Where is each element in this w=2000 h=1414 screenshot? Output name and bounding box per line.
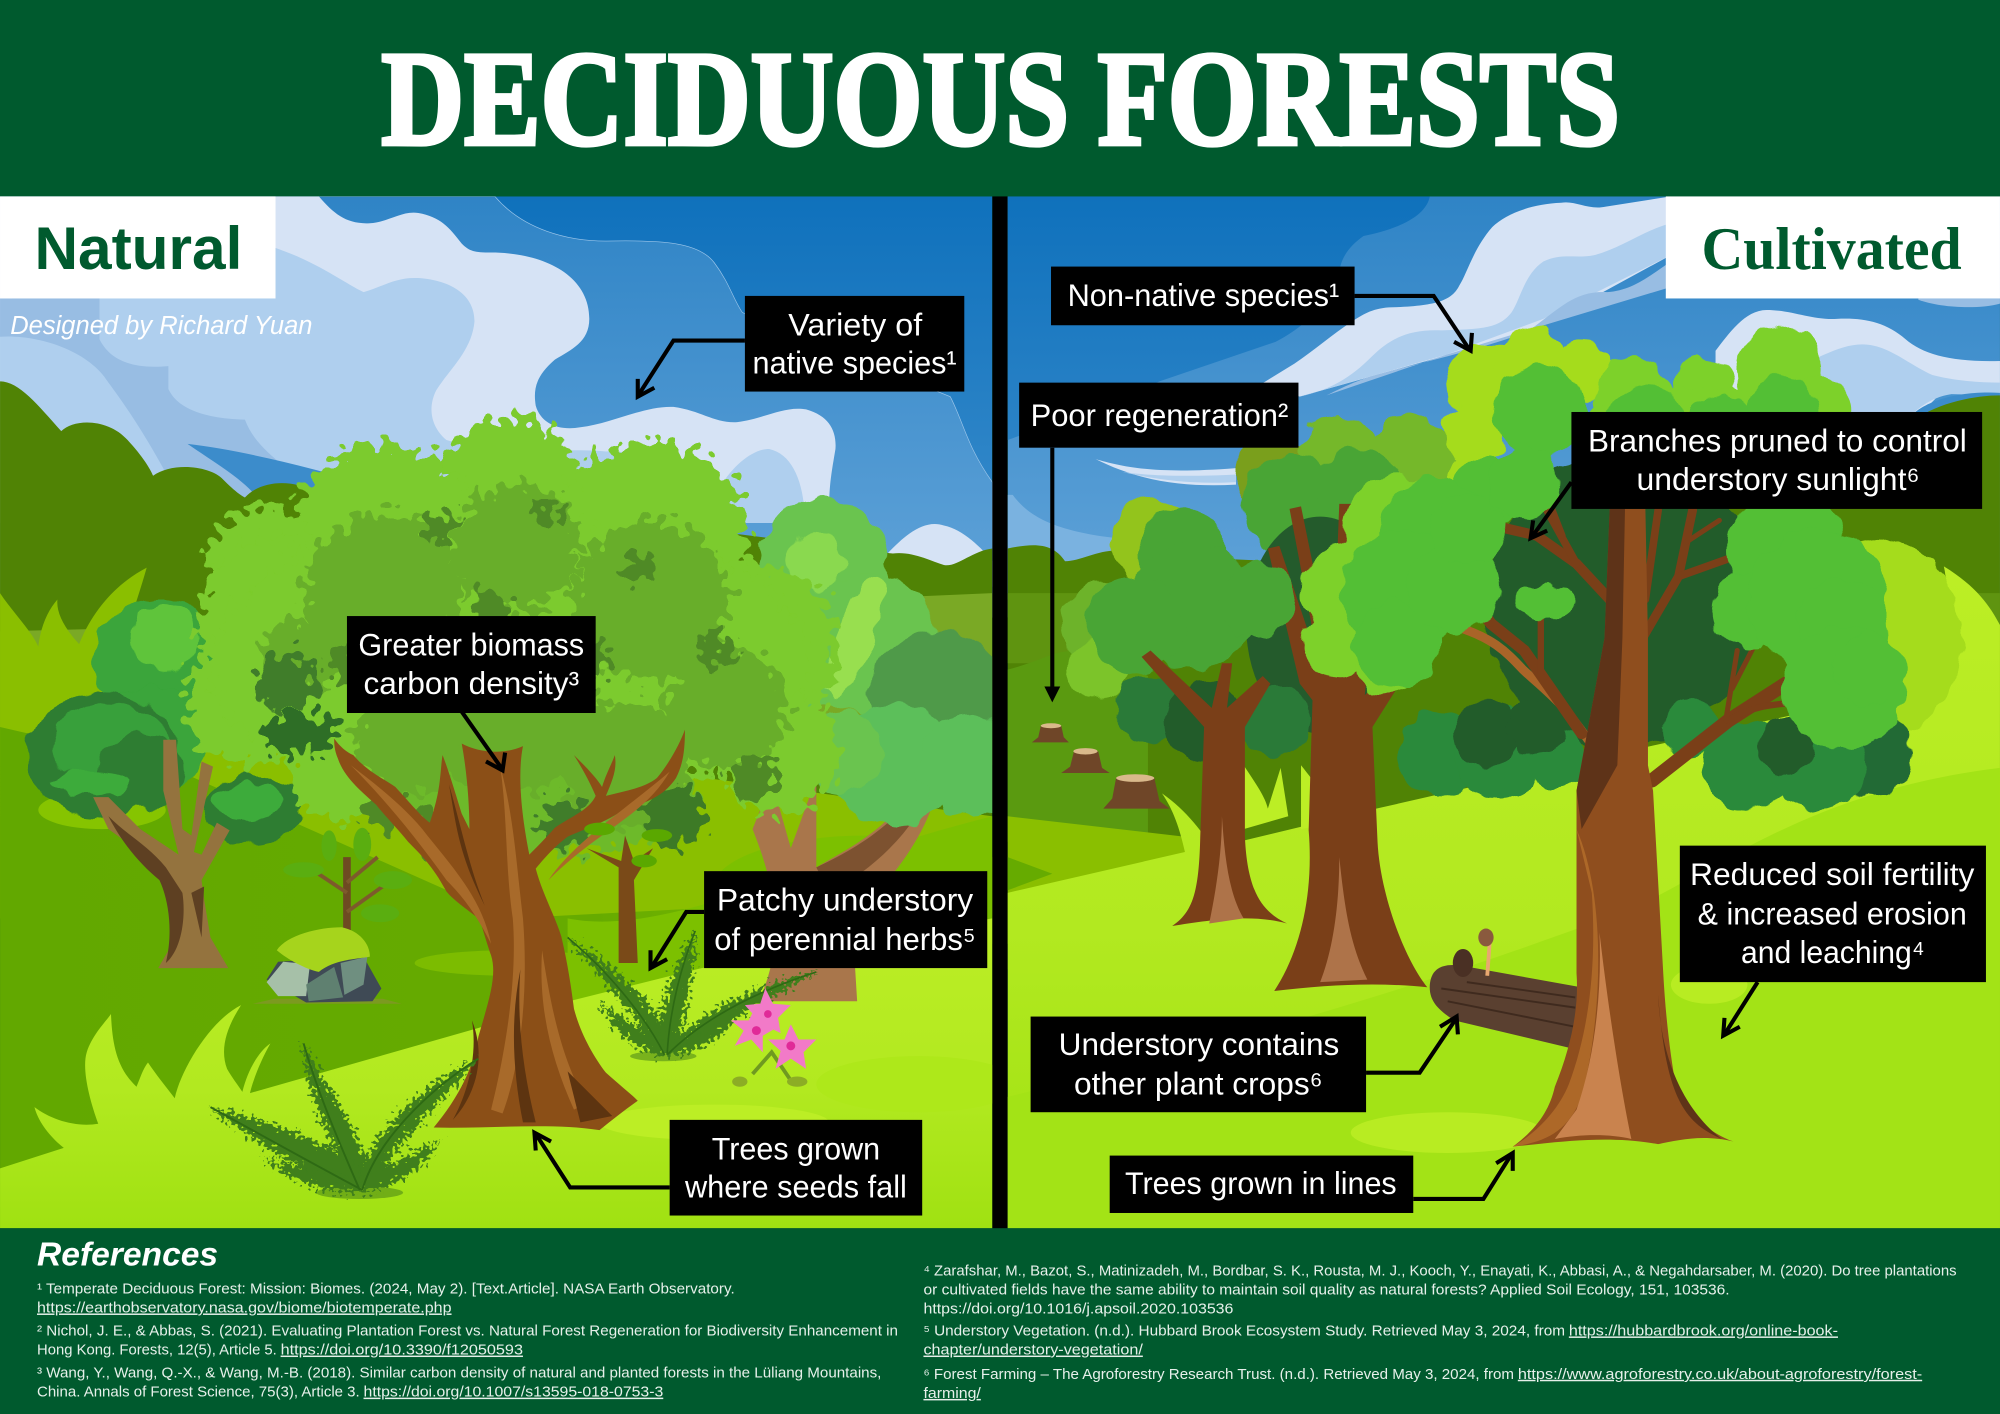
- tree C branches and trunk: [1462, 508, 1786, 1147]
- back right tree: [752, 495, 992, 1002]
- background hills: [0, 381, 1020, 1228]
- annotation: reduced soil fertility: & increased erosion: [1698, 896, 1967, 932]
- annotation: reduced soil fertility: and leaching⁴: [1741, 934, 1925, 970]
- middle understory tree: [584, 823, 672, 963]
- annotation: poor regeneration: [1019, 383, 1298, 700]
- reference 4: ⁴ Zarafshar, M., Bazot, S., Matinizadeh, M., Bordbar, S. K., Rousta, M. J., Kooch, Y., Enayati, K., Abbasi, A., & Negahdarsaber, M. (2020). Do tree plantations: [923, 1263, 1957, 1279]
- rock with moss: [253, 927, 402, 1004]
- annotation: understory crops: Understory contains: [1059, 1026, 1339, 1062]
- annotation: poor regeneration: Poor regeneration²: [1031, 397, 1288, 433]
- annotation: variety of native species: Variety of: [788, 306, 922, 342]
- big natural tree trunk: [334, 730, 685, 1130]
- reference 1: [37, 1281, 735, 1316]
- left small tree: [26, 597, 301, 968]
- label: cultivated: [1666, 196, 2000, 298]
- reference 3: ³ Wang, Y., Wang, Q.-X., & Wang, M.-B. (2018). Similar carbon density of natural and planted forests in the Lüliang Mountains,: [37, 1366, 881, 1382]
- label: cultivated: Cultivated: [1702, 216, 1962, 282]
- header band: [0, 0, 2000, 196]
- annotation: understory crops: other plant crops⁶: [1074, 1065, 1323, 1101]
- reference 4: or cultivated fields have the same ability to maintain soil quality as natural forests? Applied Soil Ecology, 151, 103536.: [923, 1283, 1730, 1299]
- panel divider: [992, 196, 1008, 1228]
- reference 1: https://earthobservatory.nasa.gov/biome/biotemperate.php: [37, 1300, 452, 1316]
- annotation: trees grown in lines: Trees grown in lines: [1125, 1165, 1397, 1201]
- reference 6: ⁶ Forest Farming – The Agroforestry Research Trust. (n.d.). Retrieved May 3, 2024, from: [923, 1367, 1514, 1383]
- reference 5: ⁵ Understory Vegetation. (n.d.). Hubbard Brook Ecosystem Study. Retrieved May 3, 2024, from: [923, 1323, 1565, 1339]
- reference 5: [923, 1323, 1838, 1359]
- annotation: non-native species: Non-native species¹: [1068, 277, 1339, 313]
- annotation: patchy understory: [651, 871, 987, 968]
- tree B canopy and trunk: [1235, 415, 1476, 991]
- background hills: [1008, 395, 2000, 969]
- label: natural: Natural: [34, 215, 242, 282]
- annotation: trees grown where seeds fall: Trees grown: [712, 1130, 880, 1166]
- reference 2: Hong Kong. Forests, 12(5), Article 5.: [37, 1343, 277, 1359]
- reference 2: https://doi.org/10.3390/f12050593: [281, 1343, 523, 1359]
- reference 2: ² Nichol, J. E., & Abbas, S. (2021). Evaluating Plantation Forest vs. Natural Forest Regeneration for Biodiversity Enhancement in: [37, 1323, 898, 1339]
- reference 6: farming/: [923, 1386, 982, 1402]
- fern: foreground: [210, 1043, 478, 1199]
- label: natural: [0, 196, 276, 298]
- reference 3: China. Annals of Forest Science, 75(3), Article 3.: [37, 1385, 360, 1401]
- annotation: reduced soil fertility: Reduced soil fertility: [1690, 856, 1975, 892]
- reference 5: https://hubbardbrook.org/online-book-: [1569, 1323, 1838, 1339]
- tree stumps: [1032, 723, 1170, 809]
- lime ground: [1008, 566, 2000, 1228]
- sky: [0, 196, 992, 617]
- tree C back canopy: [1398, 327, 1962, 811]
- sapling: [283, 828, 412, 937]
- title: DECIDUOUS FORESTS: [381, 25, 1620, 174]
- annotation: branches pruned: understory sunlight⁶: [1636, 461, 1920, 497]
- annotation: trees grown where seeds fall: [534, 1120, 922, 1216]
- reference 2: [37, 1323, 898, 1359]
- annotation: variety of native species: [638, 296, 964, 397]
- clouds: [0, 196, 992, 587]
- annotation: understory crops: [1031, 1017, 1458, 1112]
- reference 4: https://doi.org/10.1016/j.apsoil.2020.103536: [923, 1302, 1233, 1318]
- annotation: patchy understory: of perennial herbs⁵: [714, 921, 976, 957]
- credit text: Designed by Richard Yuan: [10, 312, 313, 340]
- tree A canopy and trunk: [1060, 499, 1311, 926]
- annotation: greater biomass carbon density: [347, 616, 596, 770]
- reference 3: [37, 1366, 881, 1401]
- big natural tree canopy: [185, 417, 839, 855]
- reference 6: https://www.agroforestry.co.uk/about-agroforestry/forest-: [1518, 1367, 1922, 1383]
- reference 6: [923, 1367, 1922, 1402]
- annotation: greater biomass carbon density: Greater biomass: [358, 627, 584, 663]
- fallen log and mushroom: [1430, 928, 1577, 1048]
- clouds: [1096, 196, 2000, 485]
- pink flower: [731, 988, 816, 1087]
- panel: cultivated forest scene: [1008, 196, 2000, 1228]
- references panel: [0, 1228, 2000, 1414]
- fern: mid: [568, 931, 816, 1061]
- annotation: variety of native species: native species¹: [753, 345, 957, 381]
- reference 3: https://doi.org/10.1007/s13595-018-0753-3: [364, 1385, 663, 1401]
- lime ground and grass: [0, 918, 1020, 1228]
- annotation: reduced soil fertility: [1680, 846, 1986, 1036]
- tree C front canopy: [1301, 446, 1904, 750]
- reference 5: chapter/understory-vegetation/: [923, 1343, 1144, 1359]
- annotation: greater biomass carbon density: carbon density³: [364, 665, 579, 701]
- annotation: trees grown in lines: [1110, 1153, 1513, 1213]
- sky: [1008, 196, 2000, 617]
- annotation: patchy understory: Patchy understory: [717, 882, 973, 918]
- references heading: References: [37, 1236, 218, 1273]
- annotation: branches pruned: [1531, 412, 1982, 538]
- annotation: branches pruned: Branches pruned to control: [1588, 423, 1967, 459]
- panel: natural forest scene: [0, 196, 1020, 1228]
- annotation: trees grown where seeds fall: where seeds fall: [684, 1169, 907, 1205]
- reference 4: [923, 1263, 1957, 1318]
- reference 1: ¹ Temperate Deciduous Forest: Mission: Biomes. (2024, May 2). [Text.Article]. NASA Earth Observatory.: [37, 1281, 735, 1297]
- annotation: non-native species: [1051, 267, 1472, 351]
